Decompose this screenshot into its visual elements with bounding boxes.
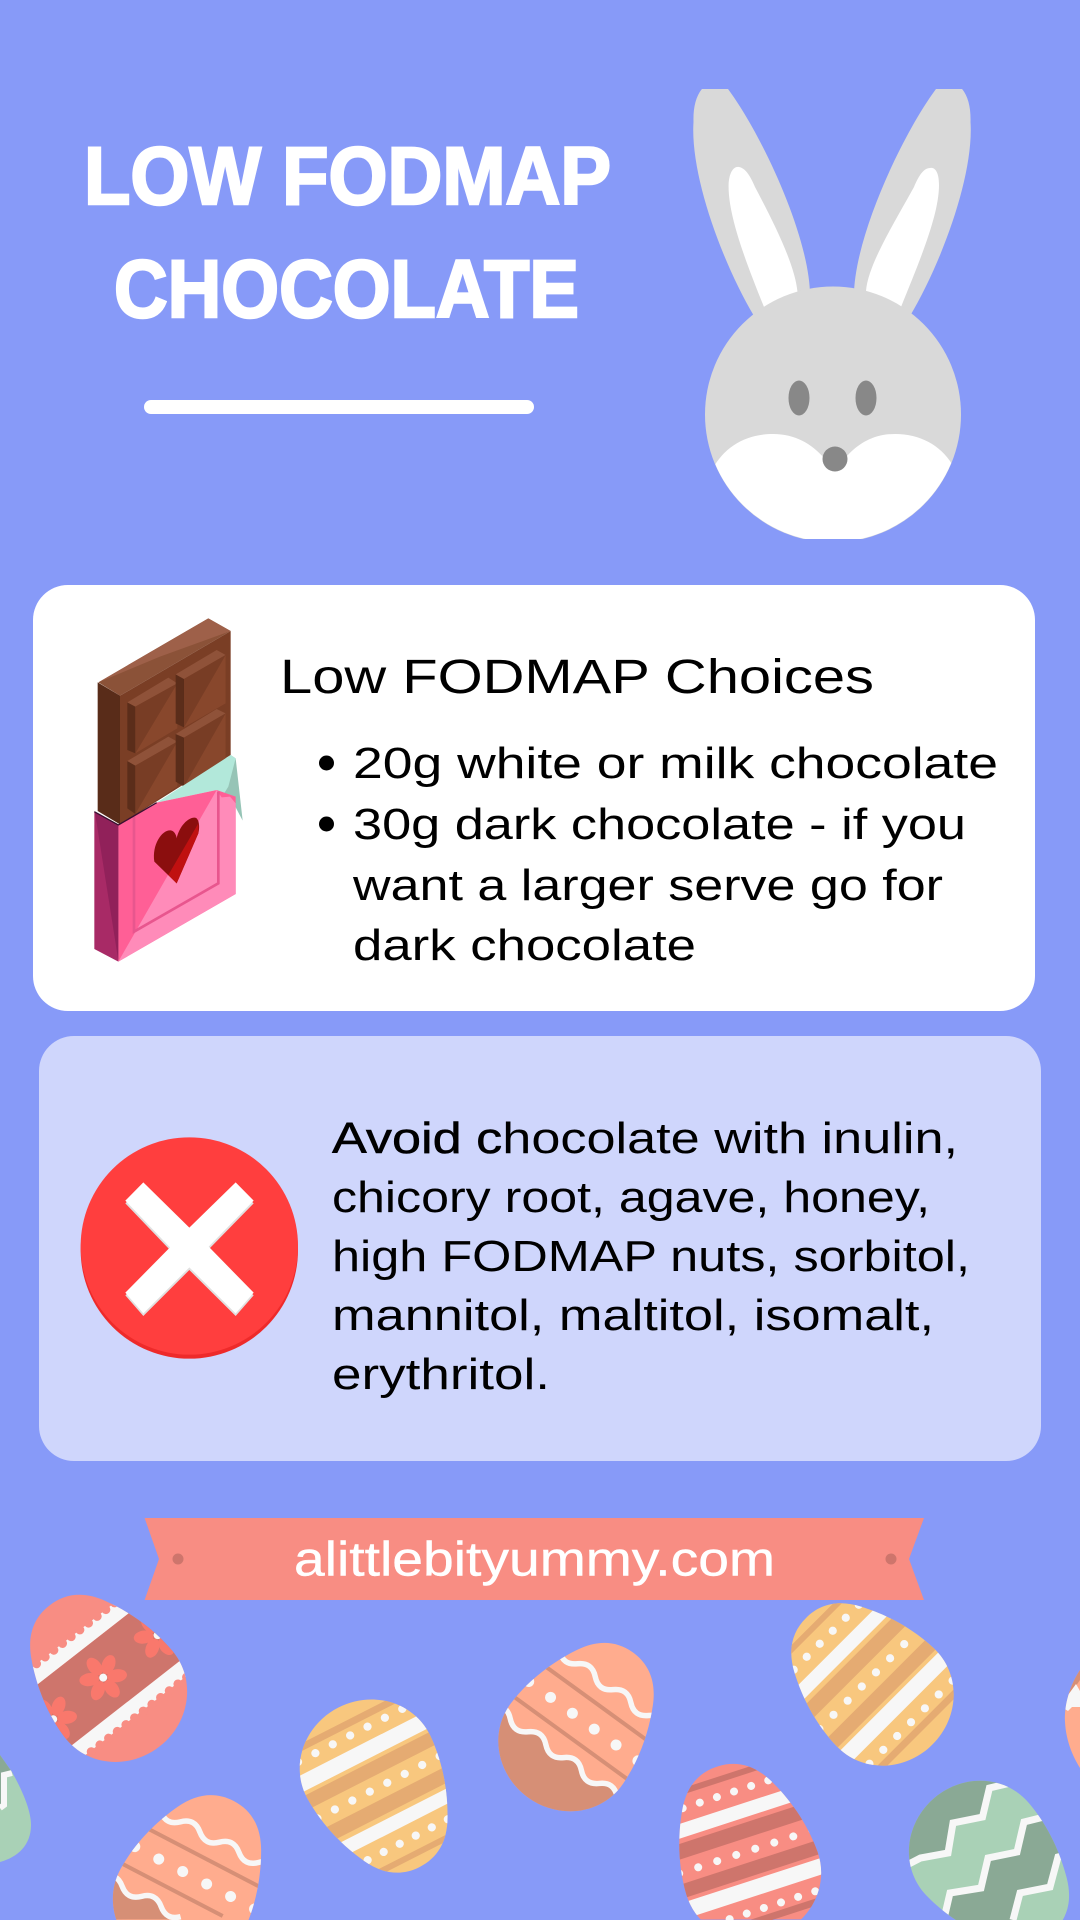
egg: red with flowers — [30, 1594, 188, 1762]
bullet list: want a larger serve go for — [352, 861, 943, 910]
panel: avoid — [39, 1036, 1041, 1461]
heading: low FODMAP choices: Low FODMAP Choices — [280, 651, 874, 704]
title underline — [144, 400, 534, 414]
title: CHOCOLATE — [114, 244, 579, 335]
bullet list: 30g dark chocolate - if you — [353, 800, 966, 849]
avoid text: erythritol. — [332, 1350, 550, 1399]
avoid text: high FODMAP nuts, sorbitol, — [332, 1232, 970, 1281]
egg: green fragment left edge — [0, 1755, 31, 1862]
title — [84, 131, 611, 335]
title: LOW FODMAP — [84, 131, 611, 222]
bullet list — [319, 739, 998, 970]
egg: peach fragment right edge — [1064, 1670, 1080, 1768]
icon: bunny — [693, 85, 971, 542]
egg: green zigzag — [908, 1780, 1069, 1920]
avoid text — [332, 1114, 970, 1399]
icon: red cross — [81, 1137, 298, 1359]
egg: red striped — [679, 1764, 822, 1920]
banner: website: alittlebityummy.com — [294, 1534, 775, 1586]
avoid text: Avoid c hocolate with inulin, — [332, 1114, 958, 1163]
avoid text: mannitol, maltitol, isomalt, — [332, 1291, 934, 1340]
bullet list: 20g white or milk chocolate — [353, 739, 998, 788]
egg: peach wavy bottom left — [112, 1795, 262, 1920]
egg: gold striped left — [300, 1700, 448, 1873]
bullet list: dark chocolate — [353, 921, 696, 970]
egg: peach wavy centre — [498, 1642, 654, 1812]
icon: chocolate bar — [94, 618, 243, 962]
banner: website — [145, 1518, 924, 1600]
avoid text: chicory root, agave, honey, — [332, 1173, 930, 1222]
panel: low FODMAP choices — [33, 585, 1035, 1011]
egg: gold striped right — [791, 1603, 954, 1766]
